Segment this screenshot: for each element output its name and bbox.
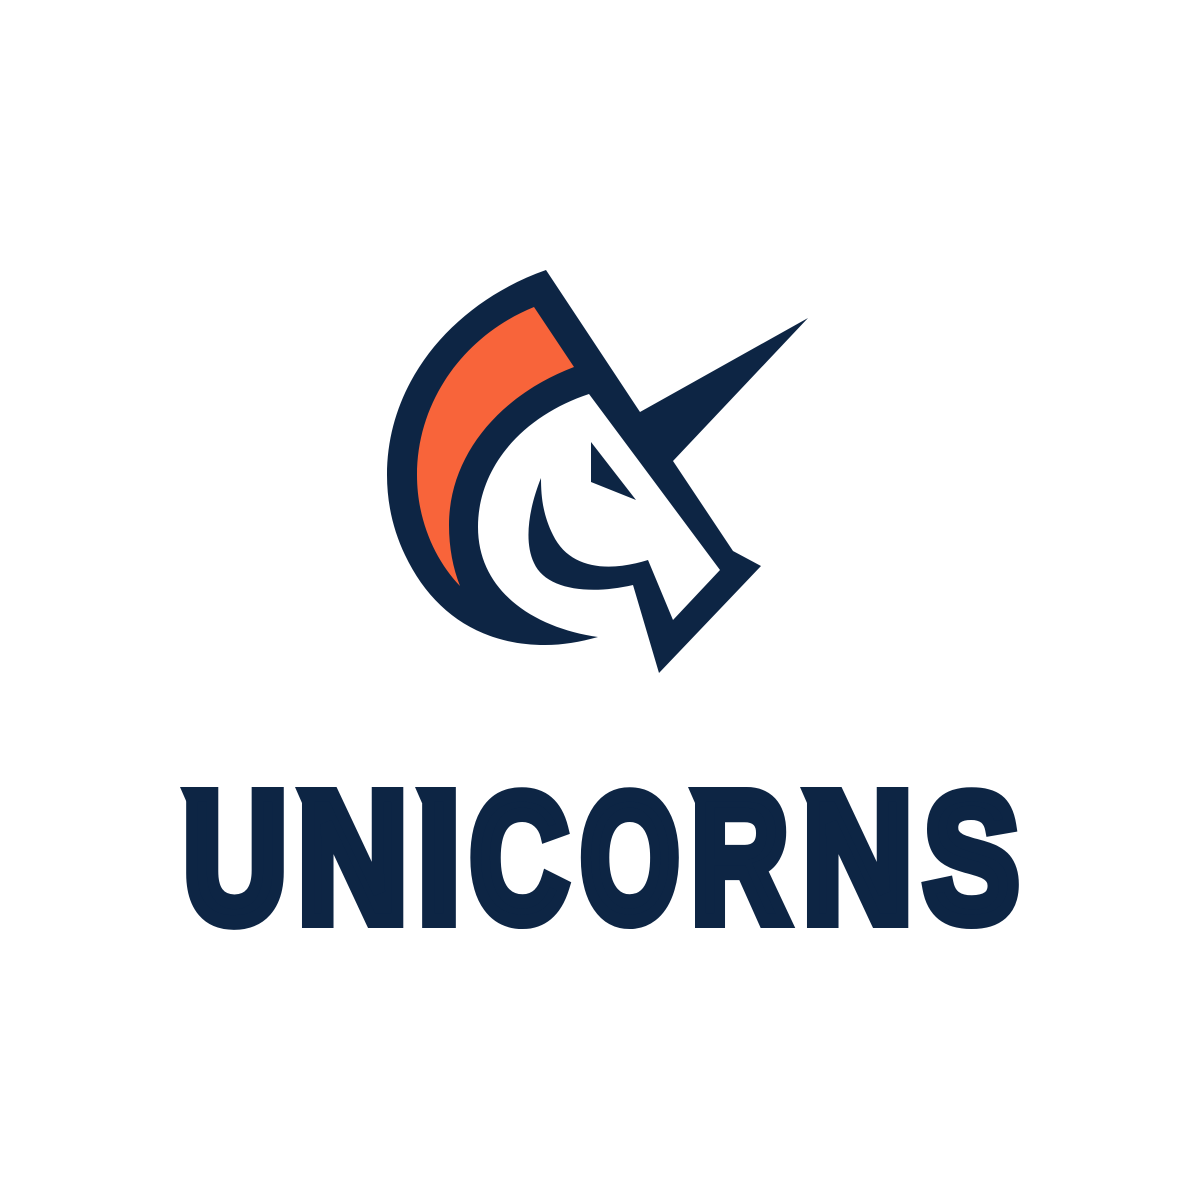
wordmark: UNICORNS: S <box>924 758 1019 959</box>
wordmark: UNICORNS: O <box>581 757 679 958</box>
wordmark: UNICORNS: N <box>803 755 912 960</box>
orange mane <box>417 307 574 586</box>
eye <box>591 442 636 500</box>
wordmark: UNICORNS: C <box>470 757 568 959</box>
wordmark: UNICORNS: I <box>418 754 460 960</box>
icon: unicorn head <box>387 270 808 673</box>
wordmark: UNICORNS: N <box>298 755 407 960</box>
wordmark: UNICORNS: U <box>183 755 287 960</box>
wordmark: UNICORNS: R <box>691 756 788 961</box>
unicorn outline and horn <box>387 270 808 673</box>
wordmark: UNICORNS <box>180 754 1019 961</box>
